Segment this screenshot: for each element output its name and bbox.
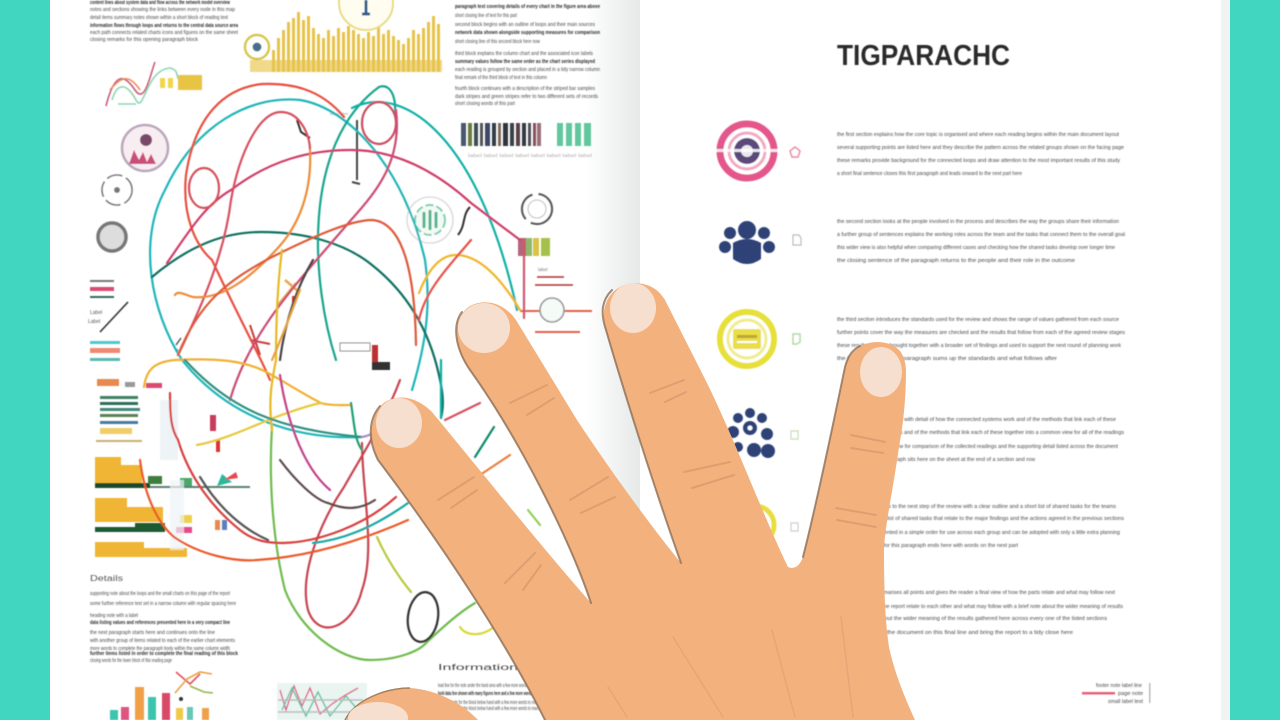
fingernail 3: [610, 283, 656, 333]
icon: small green note: [791, 431, 798, 439]
text block 3: the third section introduces the standards used for the review and shows the range of values gathered from each source: [837, 317, 1119, 323]
fingernail 1: [376, 398, 422, 448]
illustration: hand: [345, 283, 915, 720]
text block 6: closing words end the document on this final line and bring the report to a tidy close here: [837, 630, 1073, 636]
text block 6: the last section summarises all points and gives the reader a final view of how the parts relate and what may follow next: [837, 590, 1116, 596]
hand shape: [371, 283, 915, 720]
text block 2: this wider view is also helpful when comparing different cases and checking how the shared tasks develop over longer time: [837, 245, 1115, 251]
panel: left page content: [88, 0, 600, 720]
legend: left strips: Label: [88, 319, 100, 325]
icon: teal circle: [407, 197, 453, 243]
text block: lower left: the next paragraph starts here and continues onto the line: [90, 630, 215, 636]
icon: ring headset: [522, 194, 552, 224]
text block 4: closing line of this paragraph sits here on the sheet at the end of a section and row: [837, 457, 1035, 463]
footer mark: [1082, 683, 1150, 705]
text block: bottom middle: closing words for the block below hand with a few more words to read: [438, 700, 538, 706]
finger edge shading: [371, 290, 860, 720]
finger creases: [438, 380, 885, 717]
icon: yellow badge: [720, 312, 774, 366]
fingernail 2: [458, 303, 510, 353]
chart: striped bars: label label label label label label label label: [468, 153, 592, 158]
text block 1: a short final sentence closes this first paragraph and leads onward to the next part here: [837, 171, 1022, 177]
text block: top left: content lines about system data and flow across the network model overview: [90, 0, 230, 6]
text block: top right: short closing line of text for this part: [455, 13, 517, 19]
mini line chart: [106, 62, 202, 106]
text block: top left: closing remarks for this opening paragraph block: [90, 37, 198, 43]
text block: lower left: [90, 574, 238, 664]
image strip: bottom middle: [277, 683, 367, 720]
text block 1: several supporting points are listed here and they describe the pattern across the related groups shown on the facing page: [837, 145, 1124, 151]
bar chart: bottom: [110, 687, 209, 720]
text block: top right: short closing line of this second block here now: [455, 39, 540, 45]
footer mark: page note: [1118, 691, 1143, 697]
text block 6: of how the parts of the report relate to each other and what may follow with a brief note about the wider meaning of results: [837, 604, 1124, 610]
icon: yellow ring partly hidden: [736, 506, 774, 544]
text block: bottom middle: [438, 663, 543, 712]
legend: stacked rows: [96, 379, 162, 442]
text block 1: the first section explains how the core topic is organised and where each reading begins within the main document layout: [837, 132, 1120, 138]
legend: left strips: [88, 280, 128, 361]
icon: gray ring large: [98, 223, 126, 251]
text block: top left: notes and sections showing the links between every node in this map: [90, 7, 235, 13]
text block: bottom middle: lead line for the note under the hand area with a few more words to read: [438, 683, 538, 689]
footer mark: footer note label line: [1096, 683, 1142, 689]
text block: top left: each path connects related charts icons and figures on the same sheet: [90, 30, 239, 36]
text block: top right: each reading is grouped by section and placed in a tidy narrow column: [455, 67, 600, 73]
text block 2: a further group of sentences explains the working roles across the team and the tasks that connect them to the overall goal: [837, 232, 1125, 238]
text block 5: these tasks are presented in a simple order for use across each group and can be adopted with only a little extra planning: [837, 530, 1120, 536]
text block: bottom middle: closing words for the block below hand with a few more words to read: [438, 706, 538, 712]
bar chart: yellow columns: [250, 12, 442, 72]
icon: gray ring small: [102, 175, 132, 205]
network of looping lines: [140, 84, 540, 660]
text block: top right: second block begins with an outline of loops and their main sources: [455, 22, 595, 28]
mini line chart: bottom: [175, 672, 213, 701]
text block 4: [837, 417, 1125, 463]
text block: lower left: Details: [90, 574, 123, 583]
legend: left strips: Label: [90, 310, 102, 316]
text block: top right: short closing words of this part: [455, 101, 516, 107]
icon: small green box: [793, 334, 800, 344]
text block: bottom middle: Information: [438, 663, 518, 672]
text block: top right: summary values follow the same order as the chart series displayed: [455, 59, 595, 65]
mini icon: right ring: [520, 267, 592, 332]
text block: top right: [455, 4, 600, 107]
text block 5: the fifth section moves to the next step of the review with a clear outline and a short list of shared tasks for the teams: [837, 504, 1117, 510]
text block 5: a short closing line for this paragraph ends here with words on the next part: [837, 543, 1019, 549]
text block 4: the fourth section continues with detail of how the connected systems work and of the methods that link each of these: [837, 417, 1116, 423]
footer mark: small label text: [1108, 699, 1144, 705]
small scattered chart icons: label label: [330, 111, 348, 116]
text block: lower left: supporting note about the loops and the small charts on this page of the report: [90, 591, 230, 597]
text block: top right: dark stripes and green stripes refer to two different sets of records: [455, 94, 598, 100]
small scattered chart icons: [148, 111, 470, 550]
text block 1: these remarks provide background for the connected loops and draw attention to the most important results of this study: [837, 158, 1121, 164]
text block: lower left: with another group of items related to each of the earlier chart elements: [90, 638, 235, 644]
text block 3: [837, 317, 1126, 362]
text block 2: the closing sentence of the paragraph returns to the people and their role in the outcome: [837, 258, 1075, 264]
text block: top right: third block explains the column chart and the associated icon labels: [455, 51, 593, 57]
text block 6: with a brief note about the wider meaning of the results gathered here across every one of the listed sections: [837, 616, 1108, 622]
text block: top left: information flows through loops and returns to the central data source area: [90, 23, 238, 29]
text block: top right: final remark of the third block of text in this column: [455, 75, 547, 81]
icon: small pink pentagon: [790, 147, 800, 157]
thumb at bottom: [345, 688, 478, 720]
text block: bottom middle: bold data line shown with many figures here and a few more words to read: [438, 691, 543, 697]
fingernail 4: [860, 347, 902, 397]
text block: lower left: further items listed in order to complete the final reading of this block: [90, 651, 238, 657]
panel: right page content: [716, 40, 1150, 705]
icon: pink circle: [122, 125, 168, 171]
text block: top right: network data shown alongside supporting measures for comparison: [455, 30, 600, 36]
icon: small circle: [245, 35, 269, 59]
text block: top left: detail items summary notes shown within a short block of reading text: [90, 15, 229, 21]
text block 1: [837, 132, 1124, 177]
text block 2: [837, 219, 1125, 264]
text block 2: the second section looks at the people involved in the process and describes the way the groups share their information: [837, 219, 1119, 225]
text block: top left: [90, 0, 239, 43]
chart: striped bars: [461, 123, 592, 158]
icon: navy gear cluster: [727, 408, 775, 458]
text block 5: [837, 504, 1125, 549]
icon: small outline note: [793, 235, 801, 245]
text block 6: [837, 590, 1124, 636]
text block 5: of goals alongside a list of shared tasks that relate to the major findings and the actions agreed in the previous sections: [837, 516, 1125, 522]
step chart: yellow and green blocks: [95, 457, 250, 557]
title: TIGPARACHC: [837, 40, 1010, 72]
text block: top right: fourth block continues with a description of the striped bar samples: [455, 86, 595, 92]
text block: lower left: more words to complete the paragraph body within the same column width: [90, 646, 230, 652]
text block 4: work across many locations and of the methods that link each of these together into a common view for all of the readings: [837, 430, 1125, 436]
text block: lower left: data listing values and references presented here in a very compact line: [90, 620, 230, 626]
mini icon: right ring: label: [538, 267, 548, 272]
text block 3: the last sentence of the paragraph sums up the standards and what follows after: [837, 356, 1057, 362]
text block 3: these results are then brought together with a broader set of findings and used to support the next round of planning work: [837, 343, 1122, 349]
text block 4: together into a common view for comparison of the collected readings and the supporting detail listed across the document: [837, 444, 1119, 450]
text block: lower left: some further reference text set in a narrow column with regular spacing here: [90, 601, 236, 607]
mini chart: right bars: [518, 238, 550, 256]
icon: pink target: [716, 124, 778, 178]
text block: top right: paragraph text covering details of every chart in the figure area above: [455, 4, 600, 10]
icon: top circle: [339, 0, 393, 30]
text block: lower left: closing words for the lower block of this reading page: [90, 658, 172, 664]
icon: navy people group: [719, 221, 775, 264]
icon: small green mark: [791, 523, 798, 531]
text block: lower left: heading note with a label: [90, 613, 138, 619]
text block 3: further points cover the way the measures are checked and the results that follow from each of the agreed review stages: [837, 330, 1126, 336]
